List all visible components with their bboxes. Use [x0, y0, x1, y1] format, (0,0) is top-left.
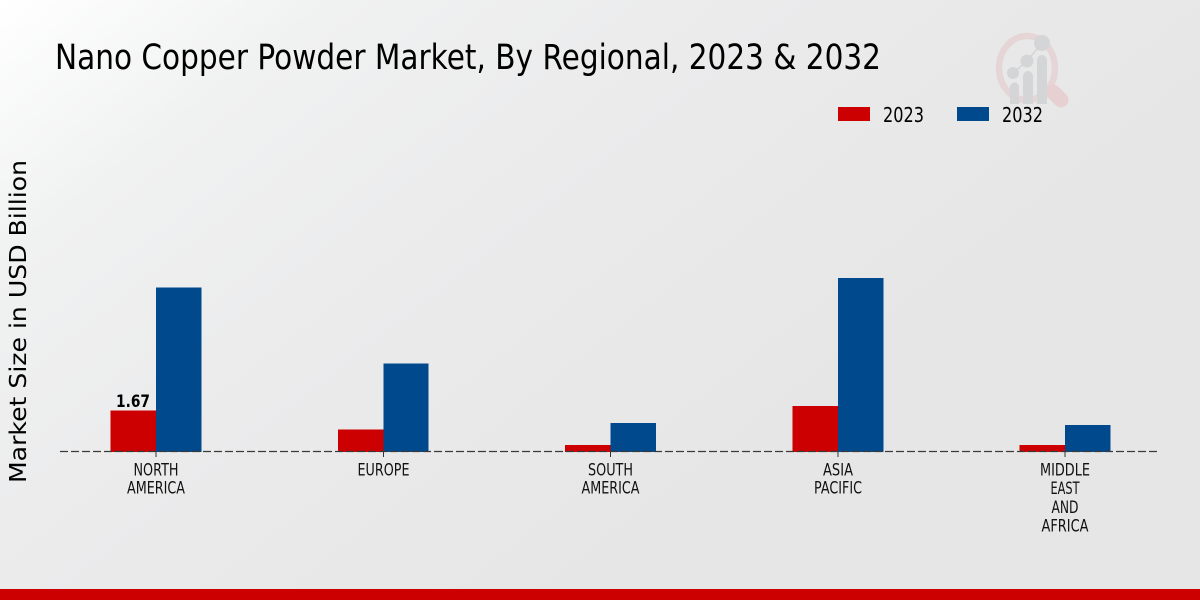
category label: North America: AMERICA [127, 478, 186, 498]
bars: South America [565, 423, 656, 452]
footer bar [0, 589, 1200, 600]
category label: Middle East and Africa: AFRICA [1042, 516, 1089, 536]
bars: Middle East and Africa [1020, 425, 1110, 452]
bar chart [60, 278, 1160, 457]
icon: watermark logo [999, 35, 1061, 104]
legend [838, 103, 1043, 127]
category label: South America: AMERICA [582, 478, 640, 498]
bars: North America [110, 288, 202, 452]
category label: South America: SOUTH [588, 460, 633, 480]
category label: Asia Pacific: PACIFIC [814, 478, 862, 498]
value label: 1.67: 1.67 [116, 392, 150, 411]
bars: Europe [338, 364, 428, 452]
bars: Asia Pacific [792, 278, 884, 452]
category label: Middle East and Africa: MIDDLE [1040, 460, 1090, 480]
category label: North America: NORTH [134, 460, 178, 480]
legend: 2032 [957, 103, 1043, 127]
legend: 2023: 2023 [883, 103, 924, 127]
category label: Asia Pacific: ASIA [823, 460, 854, 480]
legend: 2032: 2032 [1002, 103, 1043, 127]
title: Nano Copper Powder Market, By Regional, 2023 & 2032 [55, 38, 881, 78]
category label: Middle East and Africa: EAST [1050, 479, 1080, 498]
category label: Middle East and Africa: AND [1052, 498, 1078, 517]
y axis label: Market Size in USD Billion [4, 160, 32, 483]
legend: 2023 [838, 103, 924, 127]
x axis baseline [60, 452, 1160, 457]
category label: Europe: EUROPE [358, 460, 410, 480]
